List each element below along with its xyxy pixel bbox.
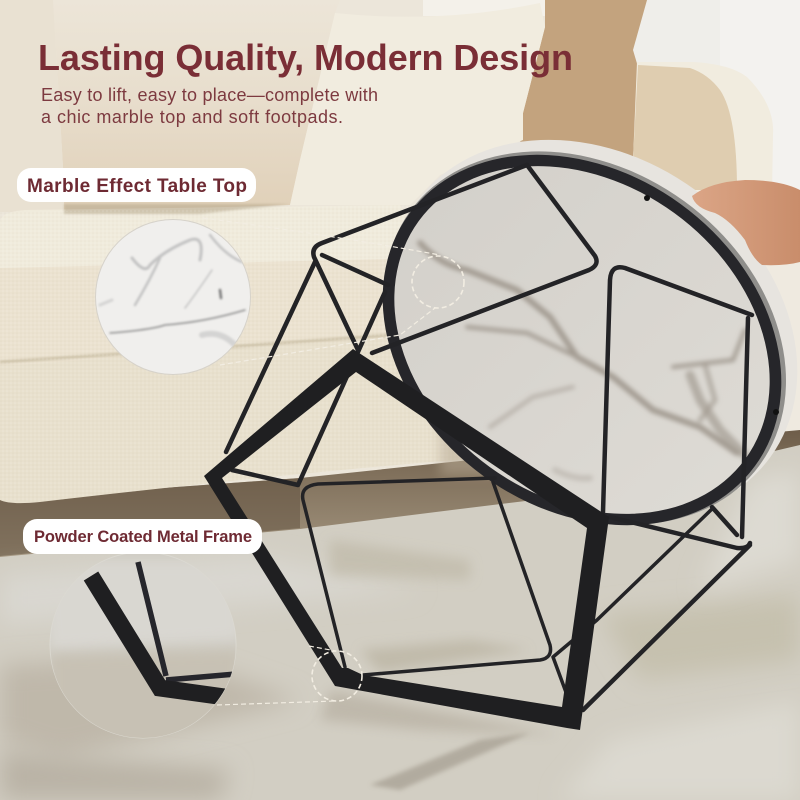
dashed circle on table	[412, 256, 464, 308]
pillow shadow	[64, 204, 290, 214]
dashed circle on foot	[312, 651, 362, 701]
wire frame: upper triangle and leg	[226, 165, 597, 485]
inset rug tones	[51, 562, 235, 647]
ring screws	[644, 195, 779, 415]
inset wire	[138, 562, 236, 680]
wire frame: lower rectangle	[303, 478, 551, 675]
inset thick bars	[91, 576, 232, 698]
callout: dashed connectors to frame foot	[217, 646, 362, 705]
callout: dashed connectors to table top	[203, 218, 464, 365]
label: marble effect table top: Marble Effect Table Top	[27, 176, 247, 197]
sofa back left	[0, 0, 64, 212]
pillow: tan	[520, 0, 647, 160]
floor shadow at left	[0, 478, 300, 556]
rug tonal pattern	[0, 470, 800, 800]
sofa base	[0, 335, 480, 503]
seat cushion front	[0, 255, 440, 365]
sofa arm	[633, 62, 773, 195]
thick metal frame pentagon	[204, 349, 609, 730]
table rim	[317, 62, 800, 596]
metal ring	[310, 78, 800, 602]
pillow: white	[290, 3, 545, 205]
sofa back and pillows	[0, 0, 800, 440]
hand holding table	[692, 180, 800, 265]
seam shadow	[0, 333, 420, 362]
marble surface	[394, 166, 770, 514]
label: marble effect table top	[17, 168, 256, 202]
floor	[0, 430, 800, 557]
rug	[0, 440, 800, 800]
seat cushion top	[0, 205, 430, 268]
pillow: large beige	[53, 0, 340, 212]
subtitle text block: Easy to lift, easy to place—complete with	[41, 85, 378, 105]
sofa seat and base	[0, 204, 800, 800]
sofa arm inner tan	[633, 65, 737, 190]
label: powder coated metal frame	[23, 519, 262, 554]
wire frame: right triangle and leg	[553, 267, 752, 710]
sofa weave texture	[0, 205, 480, 502]
title: Lasting Quality, Modern Design	[38, 37, 573, 78]
inset: marble texture circle	[95, 219, 251, 375]
label: powder coated metal frame: Powder Coated Metal Frame	[34, 528, 252, 546]
inset: frame foot magnified circle	[50, 554, 236, 738]
table top underside	[382, 140, 786, 526]
right sofa side	[765, 190, 800, 440]
subtitle text block	[41, 85, 378, 127]
rim inner edge	[311, 74, 800, 602]
subtitle text block: a chic marble top and soft footpads.	[41, 107, 343, 127]
